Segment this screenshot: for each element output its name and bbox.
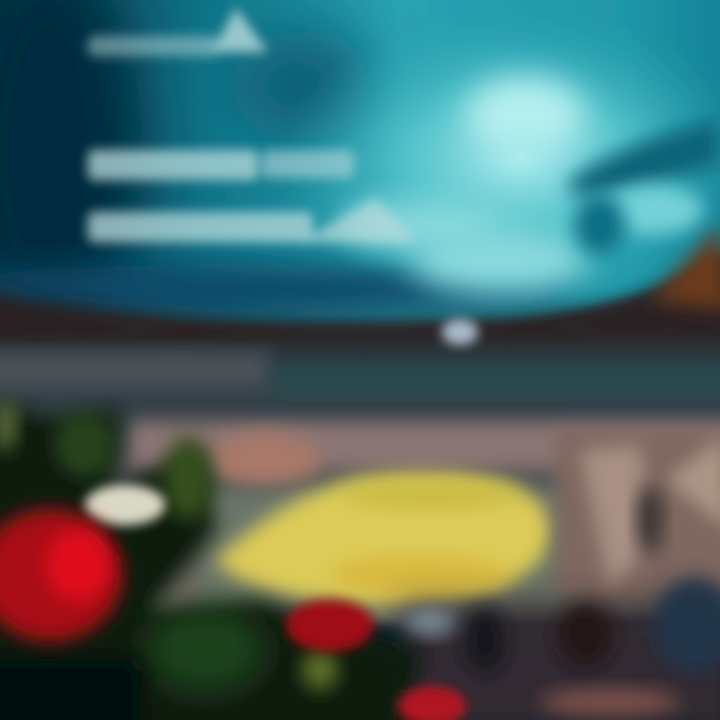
foliage (0, 399, 420, 720)
blurred heading marks (88, 8, 418, 242)
right crowd (400, 430, 720, 720)
sky background (0, 0, 720, 380)
stands (0, 225, 720, 620)
red flowers (0, 509, 466, 720)
white flower (85, 485, 165, 525)
court (215, 472, 552, 604)
